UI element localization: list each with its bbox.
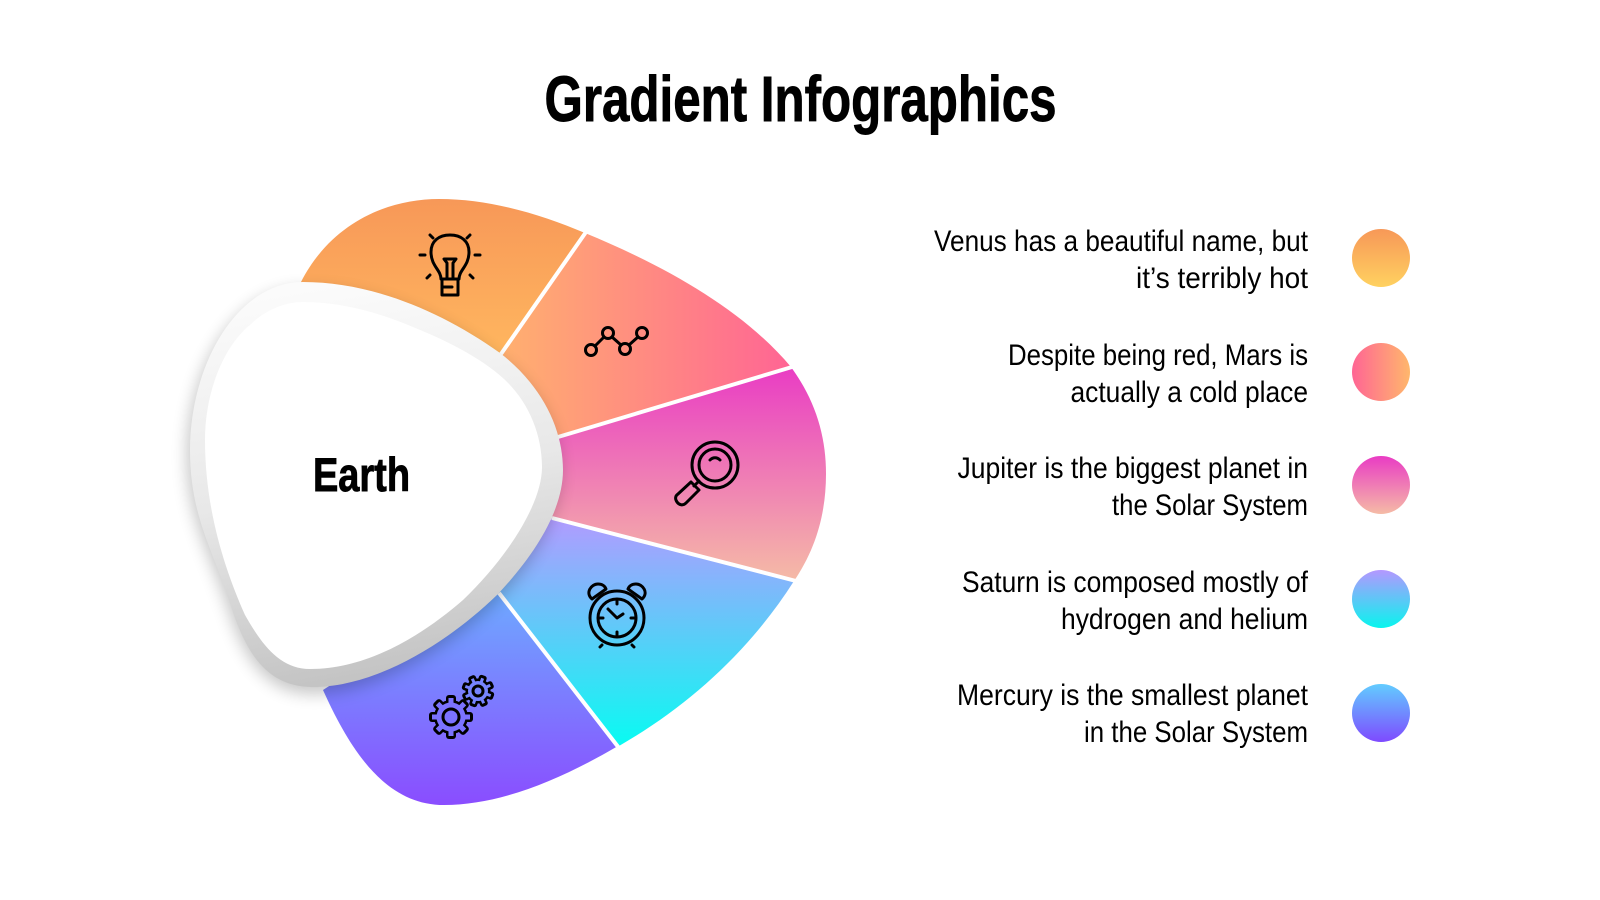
segment dividers bbox=[499, 232, 796, 748]
segment: purple bbox=[323, 593, 618, 805]
item: Venus dot bbox=[1352, 229, 1410, 287]
item: Mercury text: in the Solar System bbox=[1084, 716, 1308, 749]
icon: line chart bbox=[586, 328, 648, 356]
centre shadow bbox=[187, 289, 560, 694]
title: Gradient Infographics bbox=[544, 63, 1056, 135]
icon: alarm clock bbox=[589, 584, 645, 647]
item: Jupiter text: Jupiter is the biggest planet in bbox=[958, 452, 1308, 485]
item: Venus text: Venus has a beautiful name, but bbox=[934, 225, 1309, 258]
item: Jupiter dot bbox=[1352, 456, 1410, 514]
item: Mars text: Despite being red, Mars is bbox=[1008, 339, 1308, 372]
item: Mercury text: Mercury is the smallest planet bbox=[957, 679, 1309, 712]
segment: blue bbox=[499, 518, 794, 746]
item: Saturn dot bbox=[1352, 570, 1410, 628]
item: Jupiter text: the Solar System bbox=[1112, 489, 1308, 522]
item: Venus text: it’s terribly hot bbox=[1136, 262, 1309, 295]
icon: gears bbox=[429, 674, 495, 739]
item: Mars text: actually a cold place bbox=[1070, 376, 1308, 409]
item: Saturn text: Saturn is composed mostly of bbox=[962, 566, 1309, 599]
diagram: segmented shape with centre bbox=[187, 199, 826, 805]
centre white shape bbox=[205, 302, 542, 669]
centre label: Earth bbox=[313, 448, 410, 501]
icon: magnifier bbox=[676, 442, 738, 505]
centre rim bbox=[190, 282, 563, 687]
segment: coral bbox=[501, 233, 791, 437]
segment: orange bbox=[300, 199, 585, 354]
item: Mercury dot bbox=[1352, 684, 1410, 742]
icon: light bulb bbox=[420, 235, 480, 295]
item: Mars dot bbox=[1352, 343, 1410, 401]
segment: pink bbox=[552, 367, 826, 581]
item: Saturn text: hydrogen and helium bbox=[1061, 603, 1308, 636]
